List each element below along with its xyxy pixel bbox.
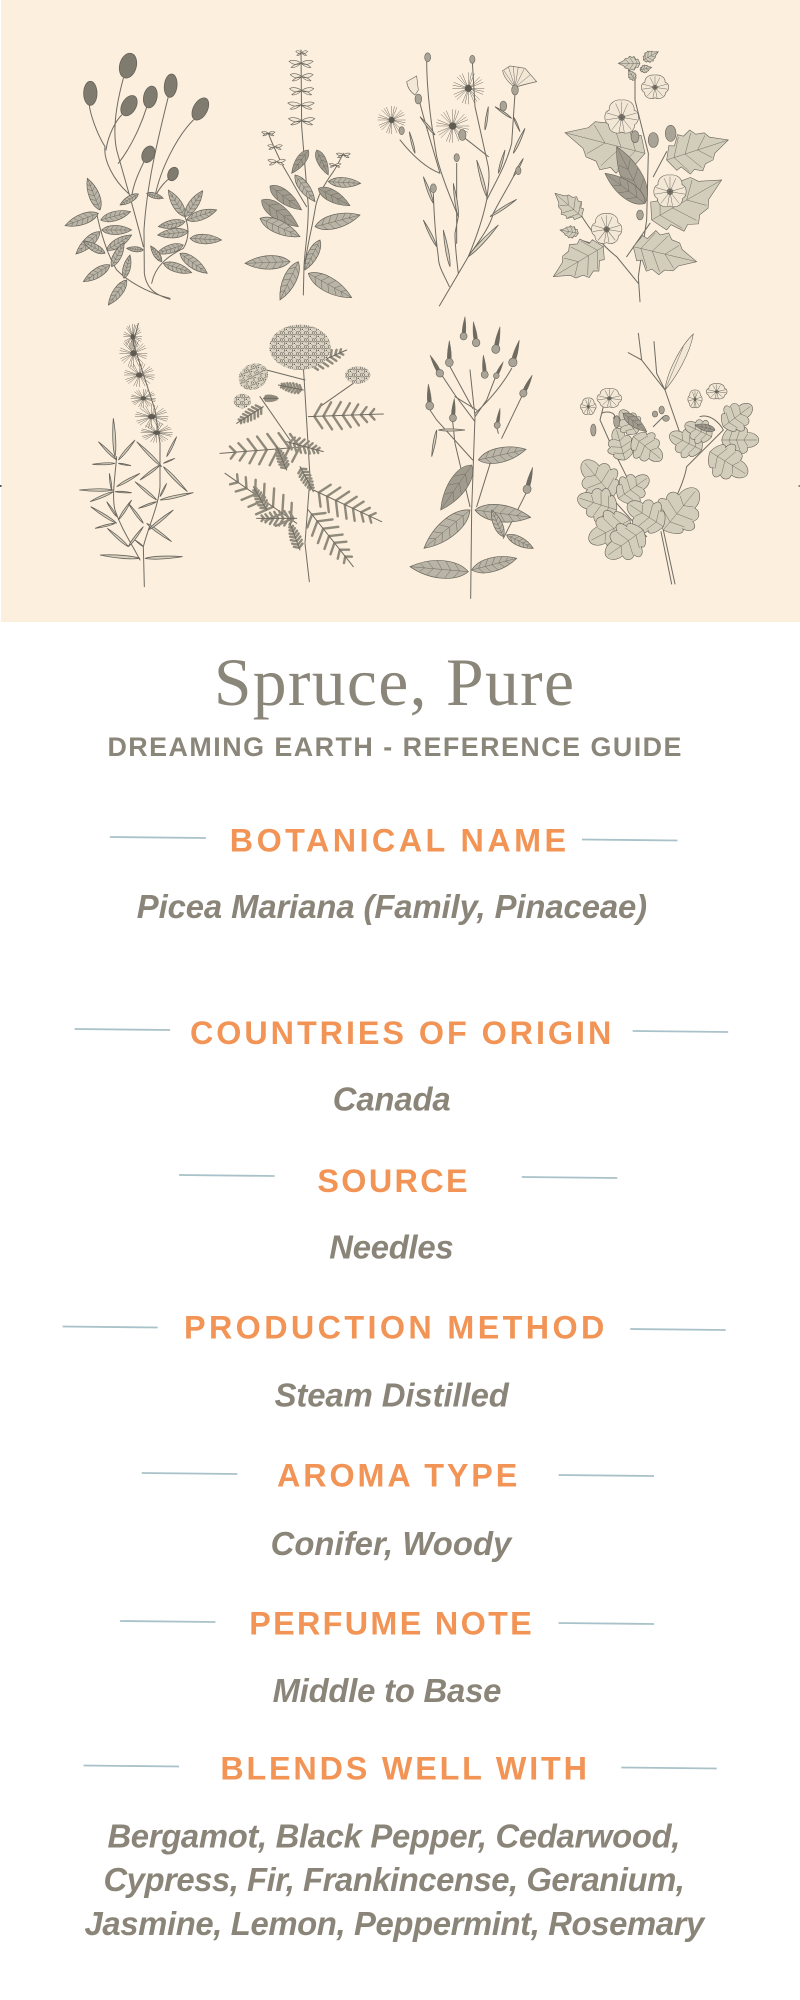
value: blends well with: Jasmine, Lemon, Peppermint, Rosemary: [85, 1905, 706, 1942]
plant: verbena with pointed spikes: [409, 316, 537, 598]
plant: burnet with oval seed heads: [63, 51, 222, 308]
plant: celandine with lobed leaves: [568, 333, 761, 584]
heading: source: SOURCE: [317, 1163, 468, 1199]
heading: perfume note: PERFUME NOTE: [249, 1605, 532, 1642]
text panel: reference guide details: [63, 645, 728, 1942]
plant: mallow with broad leaves: [543, 47, 735, 302]
heading: production method: PRODUCTION METHOD: [184, 1309, 604, 1346]
plant: sage with flower spike: [245, 50, 362, 304]
value: blends well with: [85, 1817, 706, 1942]
subtitle: DREAMING EARTH - REFERENCE GUIDE: [107, 732, 681, 762]
plant: cornflower: [378, 53, 537, 306]
value: blends well with: Bergamot, Black Pepper, Cedarwood,: [107, 1817, 680, 1855]
heading: countries of origin: COUNTRIES OF ORIGIN: [190, 1015, 611, 1051]
plant: hyssop with narrow leaves: [79, 323, 194, 587]
value: blends well with: Cypress, Fir, Frankincense, Geranium,: [103, 1861, 685, 1898]
heading: blends well with: BLENDS WELL WITH: [220, 1750, 587, 1787]
heading: botanical name: BOTANICAL NAME: [230, 822, 566, 859]
value: countries of origin: Canada: [333, 1080, 451, 1118]
banner: botanical illustrations: [0, 0, 800, 622]
value: perfume note: Middle to Base: [273, 1672, 501, 1709]
heading: aroma type: AROMA TYPE: [277, 1457, 517, 1494]
value: aroma type: Conifer, Woody: [271, 1525, 513, 1562]
title: Spruce, Pure: [214, 645, 574, 720]
plant: tansy with flower clusters and fronds: [216, 325, 387, 582]
value: source: Needles: [329, 1228, 454, 1266]
value: production method: Steam Distilled: [275, 1376, 510, 1414]
value: botanical name: Picea Mariana (Family, Pinaceae): [137, 888, 647, 925]
